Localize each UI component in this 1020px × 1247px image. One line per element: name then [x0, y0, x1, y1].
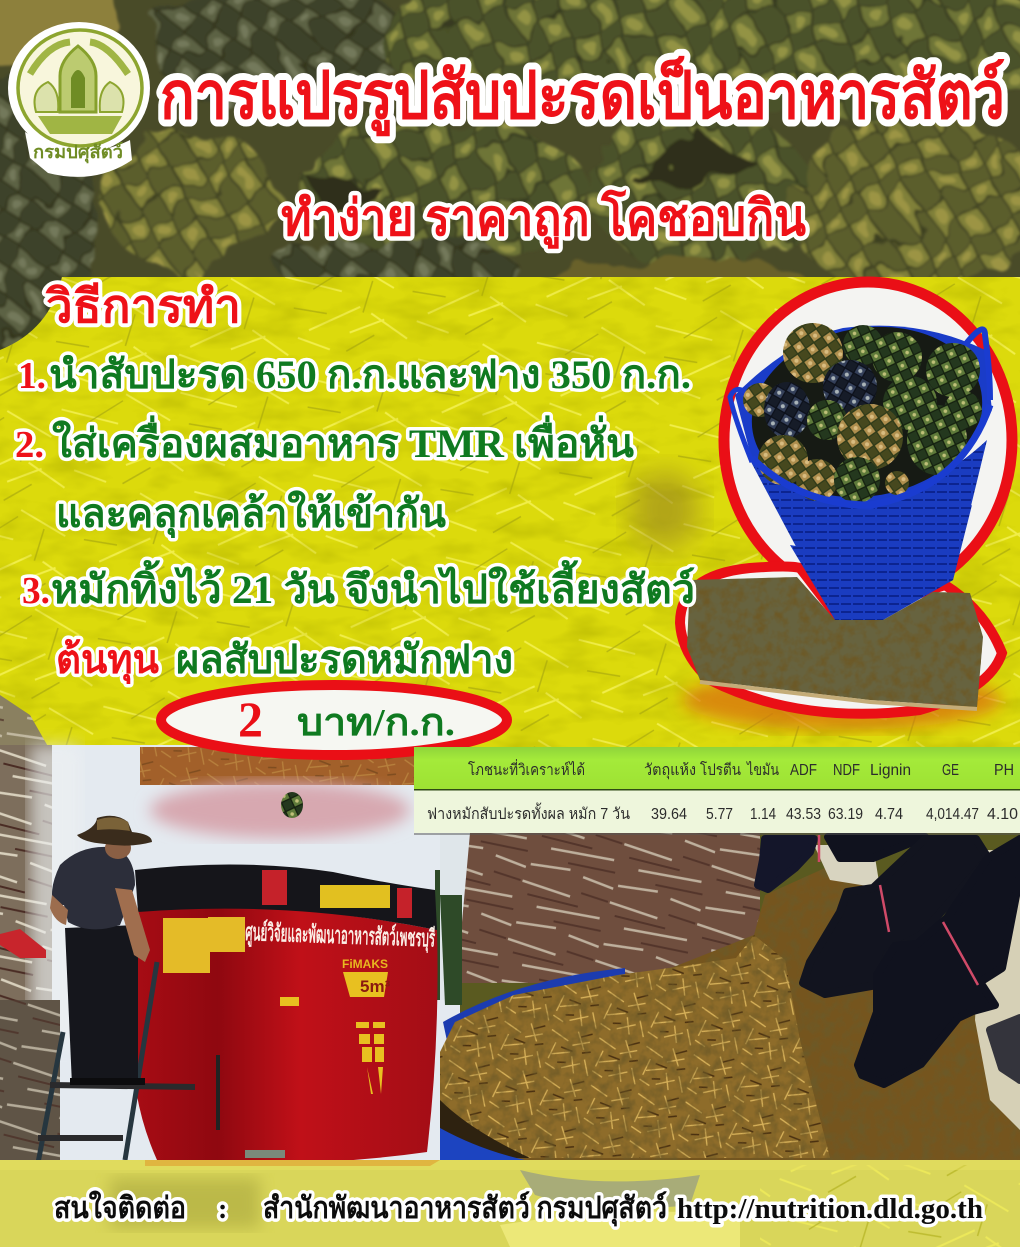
table: nutrient analysis — [414, 747, 1020, 835]
table data row: 5.77 — [706, 806, 733, 823]
machine labels: 5m³ — [360, 977, 391, 996]
machine labels — [163, 885, 436, 1158]
cost line — [56, 637, 513, 685]
contact text: : — [218, 1194, 227, 1225]
heading: method: วิธีการทำ — [45, 281, 241, 332]
table data row: 1.14 — [750, 806, 776, 823]
black rim — [135, 864, 437, 930]
photo: hay bale inside red oval — [680, 505, 1002, 730]
table data row: ฟางหมักสับปะรดทั้งผล หมัก 7 วัน — [427, 802, 630, 823]
table data row: 63.19 — [828, 806, 863, 823]
step 3: หมักทิ้งไว้ 21 วัน จึงนำไปใช้เลี้ยงสัตว์ — [51, 560, 695, 612]
footer: yellow contact band — [0, 1160, 1020, 1247]
callout: price 2 baht per kg — [161, 685, 507, 755]
callout: price 2 baht per kg: 2 — [238, 691, 263, 747]
table header row: ไขมัน — [745, 761, 779, 779]
table data row — [427, 802, 1018, 823]
panel: straw patch bottom-left of yellow panel — [0, 690, 60, 750]
red box on left — [0, 929, 46, 958]
contact text: http://nutrition.dld.go.th — [677, 1193, 983, 1225]
panel: pineapple photo header background — [0, 0, 1020, 360]
table header row: NDF — [833, 762, 860, 779]
text: ศูนย์วิจัยและพัฒนาอาหารสัตว์เพชรบุรี — [245, 918, 436, 955]
table header row: โปรตีน — [700, 761, 741, 779]
logo: Department of Livestock Development seal: กรมปศุสัตว์ — [33, 141, 123, 164]
pineapples — [743, 323, 982, 503]
basket handles and rim — [730, 329, 990, 505]
step 1: นำสับปะรด 650 ก.ก.และฟาง 350 ก.ก. — [49, 352, 691, 397]
step 2: 2. — [15, 424, 44, 466]
callout: price 2 baht per kg: บาท/ก.ก. — [297, 702, 455, 744]
man in hat — [50, 816, 152, 1085]
contact text: สนใจติดต่อ — [54, 1190, 186, 1225]
cost line: ผลสับปะรดหมักฟาง — [176, 637, 513, 682]
table data row: 4.74 — [875, 806, 903, 823]
step 2: และคลุกเคล้าให้เข้ากัน — [56, 490, 446, 539]
table header row: โภชนะที่วิเคราะห์ได้ — [468, 759, 585, 779]
step 2: ใส่เครื่องผสมอาหาร TMR เพื่อหั่น — [52, 415, 634, 466]
table header row: Lignin — [870, 762, 911, 779]
table header row: ADF — [790, 762, 817, 779]
step 1: 1. — [18, 355, 46, 397]
panel: bottom photo collage background — [0, 745, 460, 1165]
panel: yellow method panel background — [0, 277, 1020, 750]
subtitle: ทำง่าย ราคาถูก โคชอบกิน — [281, 188, 806, 249]
icon: small pineapple in the mist — [281, 792, 303, 818]
table header row: วัตถุแห้ง — [644, 762, 696, 780]
cost line: ต้นทุน — [56, 637, 159, 685]
table data row: 39.64 — [651, 806, 687, 823]
photo: black dairy cows eating — [758, 835, 1020, 1130]
photo: mixer operator and red TMR machine — [0, 816, 438, 1164]
contact text — [54, 1190, 983, 1227]
table header row: GE — [942, 762, 959, 779]
step 3: 3. — [22, 570, 50, 612]
ladder platform — [38, 962, 195, 1163]
photo: sugarcane leaves behind the feed — [440, 833, 760, 1005]
table header row: PH — [994, 762, 1014, 779]
table data row: 4.10 — [987, 806, 1018, 823]
machine labels: FiMAKS — [342, 957, 388, 971]
red mixer drum — [132, 906, 438, 1164]
table data row: 4,014.47 — [926, 806, 979, 823]
photo: chopped straw feed in blue tub and trough — [440, 860, 1020, 1160]
contact text: สำนักพัฒนาอาหารสัตว์ กรมปศุสัตว์ — [263, 1191, 667, 1227]
logo: Department of Livestock Development seal — [8, 22, 150, 177]
table data row: 43.53 — [786, 806, 821, 823]
step 2 — [15, 415, 634, 539]
table header row — [468, 759, 1014, 780]
photo: pineapples in blue basket inside red oval — [724, 282, 1012, 620]
